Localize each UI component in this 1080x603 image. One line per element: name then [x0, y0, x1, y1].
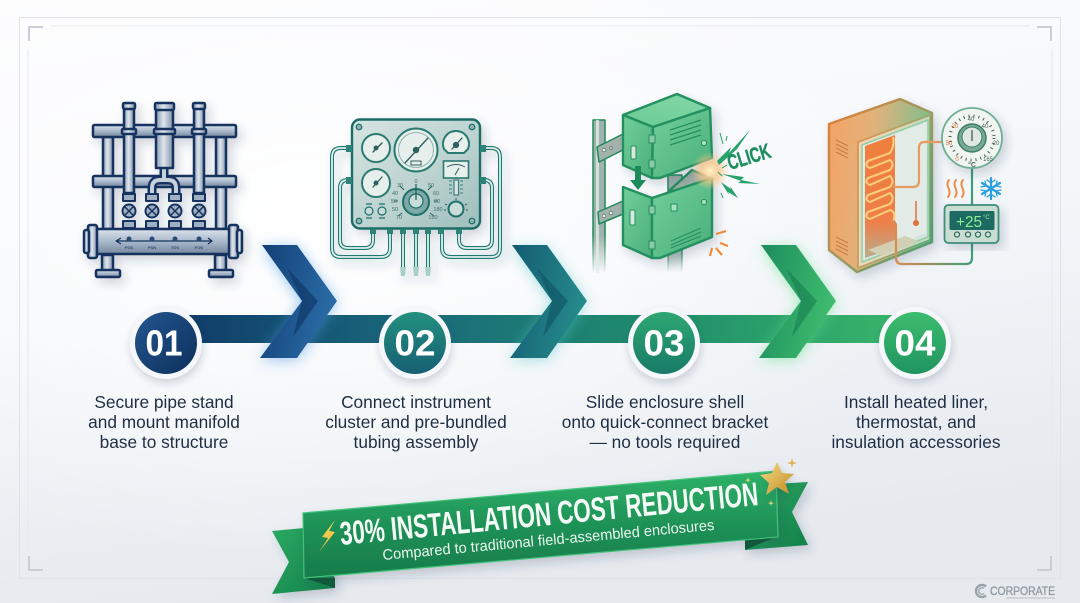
logo: corporate — [976, 585, 1055, 598]
mounting post — [593, 120, 682, 273]
thermostat dial: 40 — [982, 124, 989, 130]
step badge 02: 02 — [394, 322, 436, 364]
step 1 description: Secure pipe stand — [94, 392, 234, 412]
thermostat dial: 50 — [946, 141, 953, 147]
panel — [352, 120, 480, 228]
digital display: +25 — [956, 214, 982, 231]
headline: 30% INSTALLATION COST REDUCTION — [338, 475, 760, 552]
main dial — [391, 179, 443, 221]
sparkles — [745, 458, 797, 506]
heating coil — [866, 137, 894, 222]
cross bars — [93, 125, 236, 187]
icon: instrument cluster and tubing — [332, 120, 500, 276]
thermostat dial: 20 — [993, 141, 1000, 147]
main dial: 50 — [392, 207, 398, 213]
valves — [122, 194, 206, 228]
click label: CLICK — [725, 140, 774, 175]
step 2 description: Connect instrument — [341, 392, 491, 412]
step 1 description: and mount manifold — [88, 412, 240, 432]
step 2 description: cluster and pre-bundled — [325, 412, 507, 432]
snowflake — [981, 178, 1001, 199]
step 4 description: Install heated liner, — [844, 392, 988, 412]
step 1 description: base to structure — [100, 432, 228, 452]
fittings — [346, 145, 486, 234]
arrow: chevron 1 — [260, 245, 337, 360]
subheading: Compared to traditional field-assembled enclosures — [382, 517, 715, 564]
lower enclosure — [623, 170, 712, 258]
main dial: 80 — [434, 199, 440, 205]
ribbon body — [303, 471, 778, 578]
thermometer — [915, 201, 917, 222]
tubing — [332, 148, 500, 267]
heat waves — [947, 180, 964, 197]
step badge 02 — [379, 307, 451, 379]
thermostat dial — [942, 108, 1002, 169]
manifold — [84, 225, 242, 258]
callout ribbon — [272, 458, 808, 594]
click spark — [691, 152, 729, 190]
arrow: chevron 3 — [759, 245, 836, 360]
digital display: °C — [983, 215, 990, 221]
arrow: chevron 2 — [510, 245, 587, 360]
step 3 description: Slide enclosure shell — [586, 392, 744, 412]
step badge 03: 03 — [644, 322, 684, 364]
step 3 description: — no tools required — [590, 432, 740, 452]
thermostat dial: 0 — [955, 157, 959, 163]
screws — [356, 124, 475, 224]
y-branch — [152, 166, 176, 194]
icon: heated liner, thermostat and insulation — [829, 99, 1002, 272]
icon: enclosure sliding onto bracket — [593, 94, 774, 273]
step badge 04: 04 — [894, 322, 936, 364]
orange tick marks — [710, 231, 728, 256]
arrow: down — [630, 166, 646, 190]
main dial: 50 — [428, 183, 434, 189]
stand legs — [96, 137, 233, 277]
main dial: 40 — [392, 191, 398, 197]
step badge 01 — [130, 307, 202, 379]
main dial: 0 — [414, 179, 418, 185]
ribbon tails — [272, 482, 808, 594]
vertical pipes — [122, 103, 206, 193]
brackets — [597, 134, 623, 224]
small switches — [365, 204, 386, 218]
thermostat dial: 20 — [952, 124, 959, 130]
step 3 description: onto quick-connect bracket — [562, 412, 768, 432]
main dial: 60 — [433, 191, 439, 197]
lightning marks — [717, 130, 760, 198]
meter — [444, 161, 468, 178]
upper enclosure — [623, 94, 712, 178]
thermostat dial: 165 — [983, 157, 994, 163]
main dial: 70 — [396, 215, 402, 221]
main dial: 50 — [391, 199, 397, 205]
icon: gold star — [760, 462, 794, 495]
step badge 03 — [628, 307, 700, 379]
step 4 description: thermostat, and — [856, 412, 976, 432]
main dial: 150 — [428, 215, 438, 221]
step 4 description: insulation accessories — [831, 432, 1001, 452]
step badge 01: 01 — [146, 322, 182, 364]
icon: lightning bolt — [319, 520, 335, 552]
icon: pipe stand and manifold — [84, 103, 242, 277]
manifold: PSN — [148, 245, 156, 250]
process timeline — [130, 245, 951, 379]
gauges — [362, 128, 469, 197]
tube tips — [400, 267, 431, 276]
step 2 description: tubing assembly — [354, 432, 479, 452]
slider — [449, 180, 463, 195]
enclosure shell — [829, 99, 932, 272]
main dial: 30 — [397, 183, 403, 189]
connector band — [170, 315, 920, 343]
wiring — [890, 142, 972, 264]
logo: corporate: CORPORATE — [990, 586, 1055, 598]
step badge 04 — [879, 307, 951, 379]
digital display — [944, 205, 998, 243]
manifold: FOS — [125, 245, 133, 250]
manifold: FOS — [195, 245, 203, 250]
main dial: 180 — [433, 207, 443, 213]
secondary knob — [448, 202, 464, 216]
manifold: TOS — [171, 245, 179, 250]
thermostat dial: 40 — [968, 117, 975, 123]
thermostat dial: °C — [968, 161, 976, 169]
